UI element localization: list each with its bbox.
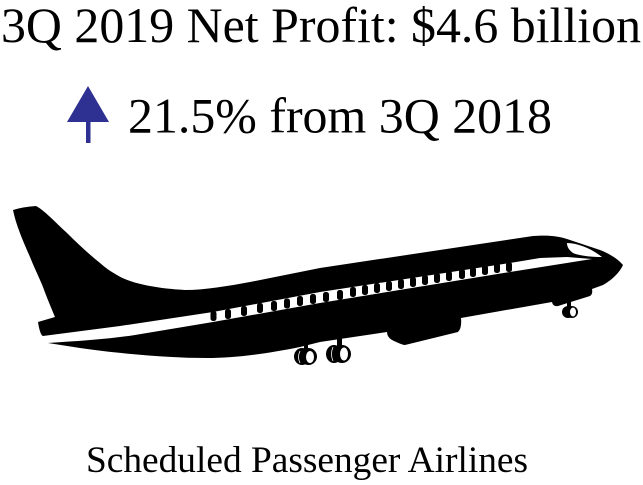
- caption: scheduled passenger airlines: Scheduled Passenger Airlines: [86, 440, 528, 481]
- icon: up arrow: [67, 86, 109, 143]
- airplane silhouette: [13, 206, 623, 365]
- plane fuselage and tail: [13, 206, 623, 358]
- plane cockpit window: [567, 243, 602, 257]
- nose landing gear: [562, 302, 578, 318]
- change from prior year: 21.5% from 3Q 2018: [128, 88, 552, 144]
- rear landing gear 1: [294, 342, 317, 365]
- plane cabin windows: [210, 262, 512, 321]
- rear landing gear 2: [326, 338, 351, 363]
